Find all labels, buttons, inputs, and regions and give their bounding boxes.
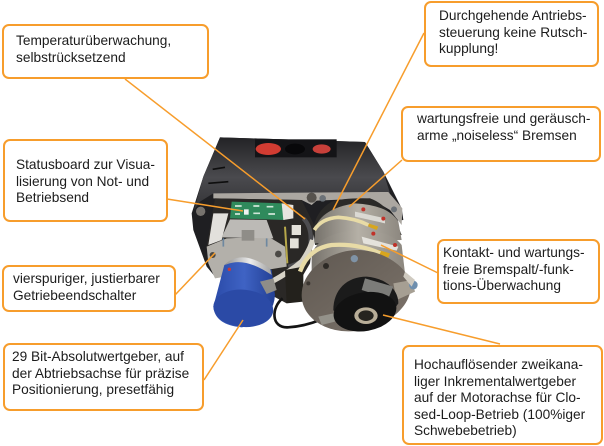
callout: Getriebeendschalter xyxy=(2,265,176,312)
dark wiring under xyxy=(285,267,303,303)
nameplate xyxy=(255,139,337,157)
callout: Inkrementalwertgeber: sed-Loop-Betrieb (100%iger xyxy=(414,406,585,422)
status board xyxy=(230,202,293,220)
leader line: Bremsspalt xyxy=(381,245,438,273)
white terminals xyxy=(290,225,301,248)
callout: Inkrementalwertgeber: liger Inkrementalwertgeber xyxy=(414,374,576,388)
callout: Getriebeendschalter: vierspuriger, justierbarer xyxy=(13,271,160,286)
callout: Inkrementalwertgeber: Hochauflösender zweikana- xyxy=(414,357,583,372)
callout: Absolutwertgeber xyxy=(3,343,204,411)
interior xyxy=(207,198,315,303)
callout: Bremsspalt: tions-Überwachung xyxy=(443,278,561,293)
encoder connector xyxy=(260,278,277,294)
absolute encoder xyxy=(212,257,275,330)
callout: Bremsspalt: Kontakt- und wartungs- xyxy=(443,245,585,260)
callout: Bremsspalt: freie Bremspalt/-funk- xyxy=(443,262,574,276)
callout: Statusboard: Statusboard zur Visua- xyxy=(16,157,155,172)
callout: Temperaturüberwachung: Temperaturüberwachung, xyxy=(16,33,171,48)
leader line: Getriebeendschalter xyxy=(175,253,215,295)
leader line: Bremsen xyxy=(349,160,402,207)
leader line: Statusboard xyxy=(167,199,243,211)
switch plate xyxy=(222,219,273,238)
callout: Antriebssteuerung: Durchgehende Antriebs- xyxy=(439,8,587,23)
cream cables xyxy=(314,217,368,230)
photo: motor assembly xyxy=(192,137,418,336)
base plate xyxy=(207,237,287,278)
callout: Inkrementalwertgeber: auf der Motorachse für Clo- xyxy=(414,390,581,405)
callout: Bremsspalt xyxy=(437,239,600,304)
upper brake disc xyxy=(313,198,402,245)
callout: Statusboard: Betriebsend xyxy=(16,190,89,205)
callout: Antriebssteuerung xyxy=(424,1,599,67)
yellow wiring xyxy=(285,227,298,300)
callout: Absolutwertgeber: Positionierung, presetfähig xyxy=(12,382,174,397)
callout: Temperaturüberwachung: selbstrücksetzend xyxy=(16,50,126,64)
lower brake disc xyxy=(312,230,405,280)
callout: Getriebeendschalter: Getriebeendschalter xyxy=(13,288,136,302)
callout: Statusboard: lisierung von Not- und xyxy=(16,174,149,188)
housing top xyxy=(194,137,390,210)
callout: Bremsen: arme „noiseless“ Bremsen xyxy=(417,128,577,142)
callout: Absolutwertgeber: 29 Bit-Absolutwertgeber, auf xyxy=(12,349,184,364)
leader line: Absolutwertgeber xyxy=(204,320,243,380)
callout: Absolutwertgeber: der Abtriebsachse für präzise xyxy=(12,366,189,380)
silver frame xyxy=(213,192,402,225)
callout: Bremsen xyxy=(401,106,601,162)
white cable xyxy=(272,240,313,282)
leader line: Temperatur xyxy=(125,79,305,219)
front plate xyxy=(302,250,411,331)
cable gland xyxy=(318,313,335,325)
encoder xyxy=(330,277,400,336)
callout: Statusboard xyxy=(3,139,168,222)
callout: Inkrementalwertgeber xyxy=(402,345,603,445)
grey cable xyxy=(288,218,311,267)
callout: Bremsen: wartungsfreie und geräusch- xyxy=(417,111,590,126)
housing outline and left wall xyxy=(192,137,403,277)
white connector block xyxy=(208,213,228,245)
black cable xyxy=(274,298,320,327)
callout: Inkrementalwertgeber: Schwebebetrieb) xyxy=(414,423,517,438)
callout: Antriebssteuerung: steuerung keine Rutsch- xyxy=(439,24,587,40)
housing grooves xyxy=(208,167,228,183)
side fitting xyxy=(393,280,415,300)
callout: Temperaturüberwachung xyxy=(2,24,209,79)
leader line: Inkrementalwertgeber xyxy=(383,315,500,344)
leader line: Antriebssteuerung xyxy=(333,33,424,210)
callout: Antriebssteuerung: kupplung! xyxy=(439,41,498,56)
screw xyxy=(196,207,205,216)
